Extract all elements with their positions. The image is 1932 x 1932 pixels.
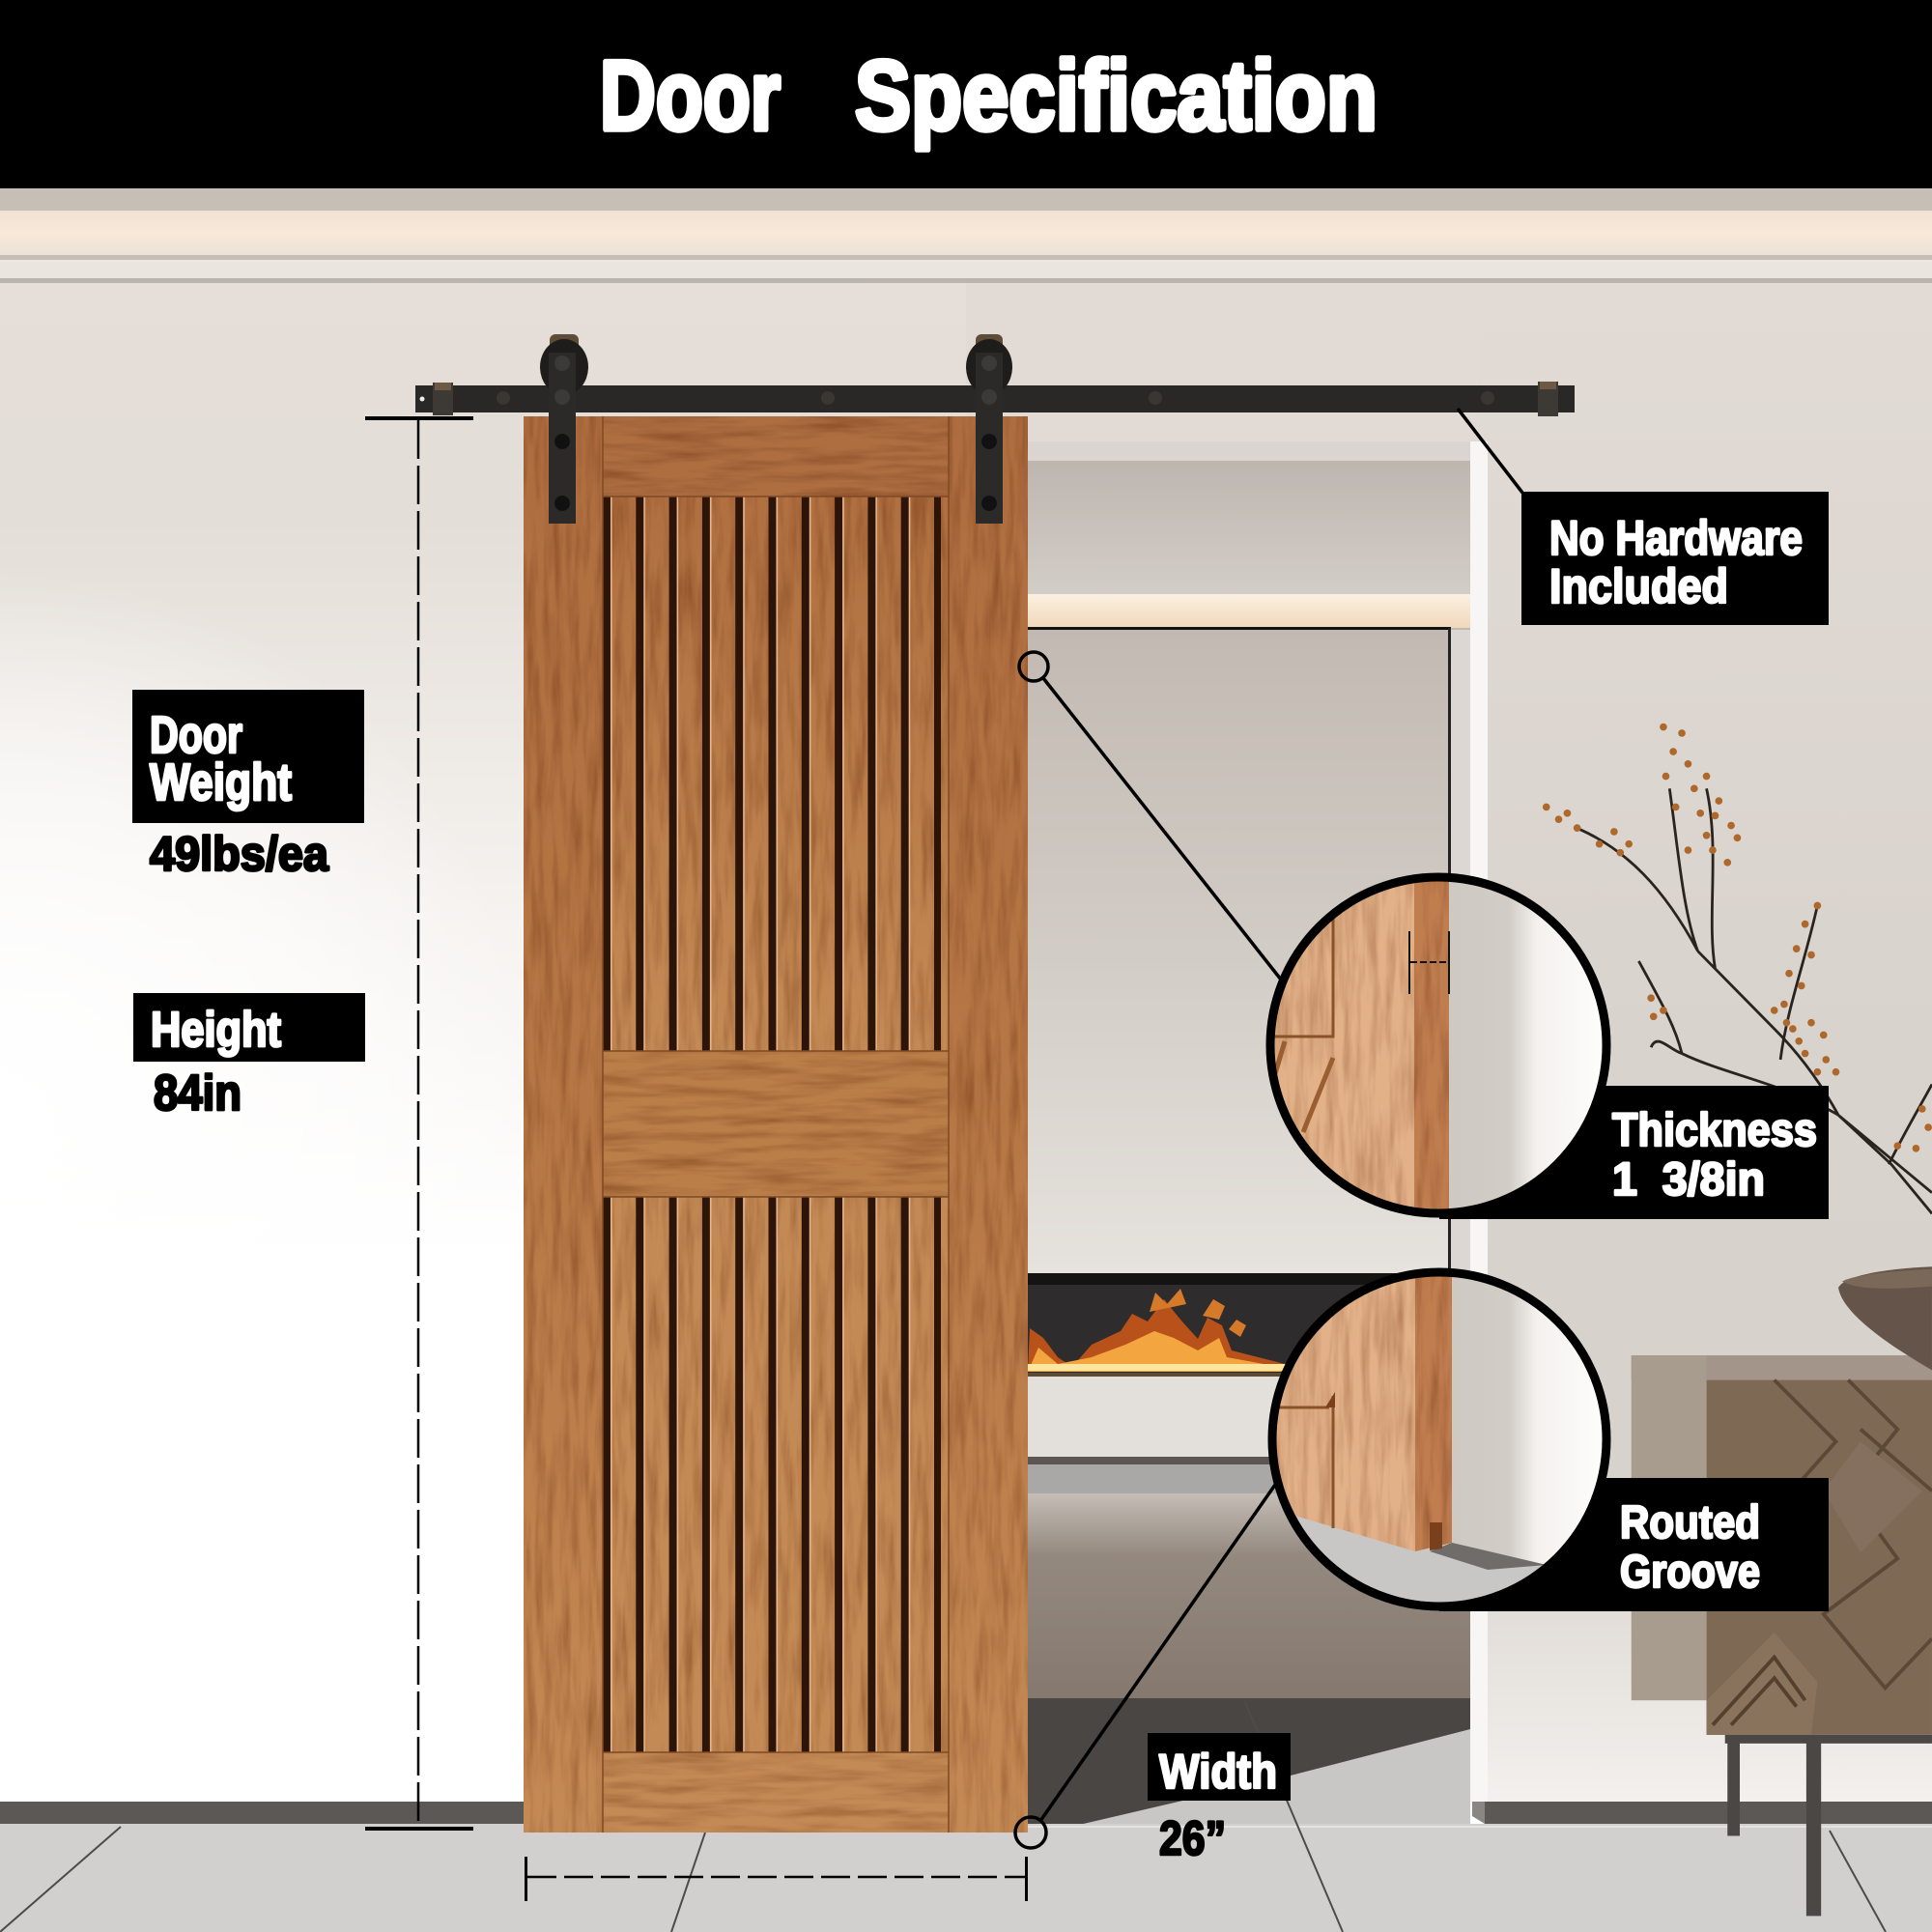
title: Specification [855,41,1378,151]
track fittings [419,382,1558,416]
callout: width: 26” [1159,1811,1226,1865]
callout: routed groove [1439,1478,1829,1611]
callout: width [1148,1733,1291,1865]
callout: thickness [1439,1086,1829,1219]
leader line: width [1015,1485,1275,1848]
callout: no hardware included: No Hardware [1549,511,1803,565]
title: Door [600,41,781,151]
callout: door weight [132,690,364,881]
ceiling cove and molding [0,188,1932,283]
callout: height: 84in [154,1065,242,1122]
callout: door weight: 49lbs/ea [150,827,329,881]
callout: door weight: Weight [150,753,292,811]
callout: no hardware included [1458,409,1829,625]
decorative bowl [1838,1266,1932,1370]
callout: width: Width [1159,1745,1277,1799]
title banner [0,0,1932,188]
leader line: thickness [1019,652,1281,980]
width dimension line [525,1857,1028,1901]
callout: door weight: Door [150,706,242,764]
callout: thickness: 1 3/8in [1612,1154,1765,1206]
callout: routed groove: Routed [1620,1497,1760,1548]
fireplace [1028,1273,1472,1377]
title [600,41,1378,151]
height dimension line [365,416,473,1831]
baseboard [0,1802,1932,1824]
right roller strap [966,334,1012,524]
doorway with room beyond [1028,441,1488,1833]
sliding hardware track [415,334,1575,524]
callout: height: Height [151,1002,281,1057]
sideboard console [1632,1355,1932,1916]
door frame stiles and rails [524,416,1028,1833]
left roller strap [540,334,588,524]
barn door [524,416,1028,1833]
callout: routed groove: Groove [1620,1547,1760,1598]
callout: height [133,993,365,1122]
floor [0,1700,1932,1932]
magnifier: door thickness detail [1265,869,1613,1221]
lower slatted panel [603,1197,949,1752]
upper slatted panel [603,497,949,1051]
track rail [415,385,1575,412]
magnifier: routed groove detail [1265,1265,1613,1613]
branch with berries [1543,724,1932,1213]
callout: thickness: Thickness [1612,1105,1817,1156]
thickness dimension mark [1408,931,1450,994]
callout: no hardware included: Included [1549,559,1728,613]
